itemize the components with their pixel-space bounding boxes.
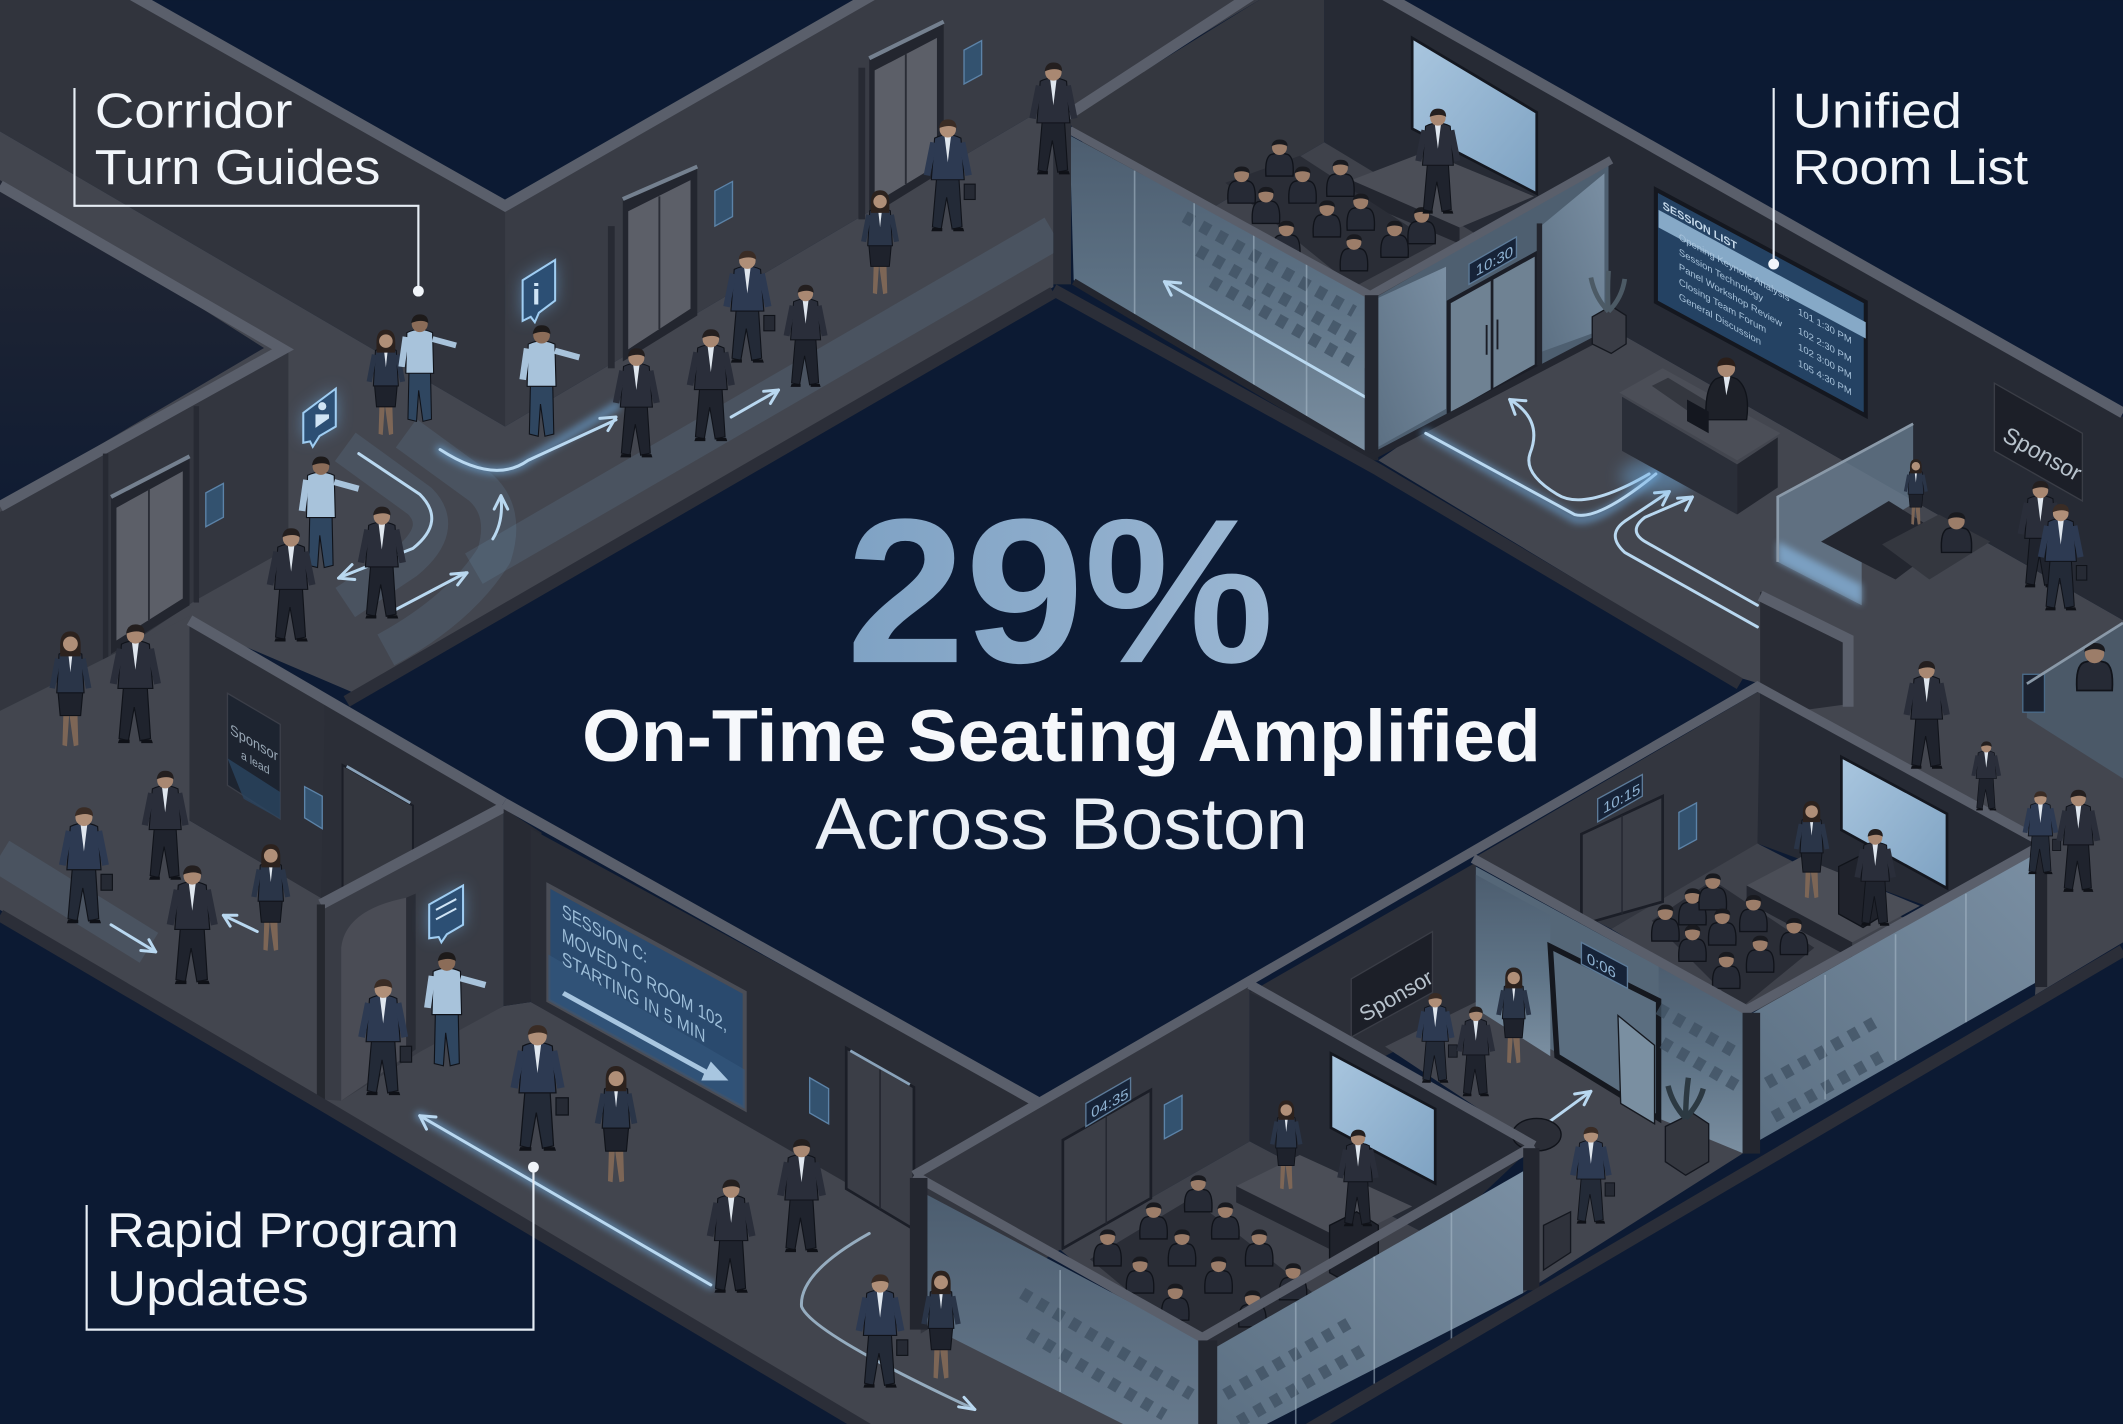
seated person: [1381, 221, 1408, 257]
seated person: [1340, 234, 1368, 271]
booth person: [1905, 459, 1926, 525]
callout: corridor turn guides: [74, 83, 424, 297]
desk glow: [1621, 459, 1697, 494]
person: lobby man: [1418, 993, 1457, 1083]
panel: lower-left corridor level: [0, 616, 1202, 1424]
person: speaker room two: [1857, 829, 1893, 926]
room three wall sign: [1164, 1095, 1182, 1139]
wall stub edge: [1760, 596, 1848, 707]
seated person: [1094, 1229, 1121, 1266]
lobby floor: [1385, 1002, 1757, 1293]
seated person: [1699, 873, 1727, 910]
room three glass right mullions: [1296, 1213, 1451, 1424]
room two left glass chairs: [1659, 1009, 1737, 1086]
callout: rapid program updates: [87, 1162, 539, 1330]
room three screen wall: [1250, 984, 1534, 1239]
guide arrow: main turn: [440, 417, 616, 470]
screen text: SESSION C:: [562, 901, 647, 968]
arch opening: [341, 898, 406, 1101]
icon: person sign: [303, 389, 336, 447]
room three clock: 04:35: [1091, 1086, 1129, 1122]
room one corner pillar: [1365, 295, 1378, 460]
sponsor sign: Sponsor: [1999, 422, 2087, 486]
screen: session update: [548, 886, 745, 1109]
person: man: [787, 285, 825, 387]
person: lobby man: [1459, 1006, 1493, 1096]
person: man: [270, 528, 312, 642]
screen: session update: STARTING IN 5 MIN: [562, 948, 705, 1048]
panel: upper-left corridor level: [0, 0, 1259, 731]
room two glass chairs: [1767, 1018, 1889, 1117]
seated person: [1168, 1229, 1196, 1266]
room three clock: [1086, 1078, 1131, 1127]
person: lobby woman: [1499, 968, 1529, 1063]
sponsor sign: [1994, 383, 2087, 501]
board rows: Opening Keynote Analysis: [1679, 232, 1789, 304]
room three screen: [1331, 1053, 1435, 1183]
wall stub: [1760, 592, 1848, 711]
guide arrow: inner return: [338, 454, 432, 580]
person: man with case: [927, 119, 975, 231]
board rows: Closing Team Forum: [1679, 277, 1766, 336]
second booth: [2023, 623, 2123, 779]
room one glass right: [1378, 267, 1446, 447]
seated person: [1279, 1263, 1307, 1300]
room three glass left: [921, 1192, 1202, 1424]
person: lobby man: [1573, 1127, 1615, 1224]
room two clock: 10:15: [1603, 781, 1640, 817]
booth lounge: [1778, 424, 1990, 605]
wall top edge: [131, 0, 873, 206]
callout text: Updates: [107, 1261, 309, 1316]
seated person: [1239, 1290, 1266, 1327]
person: man: [690, 329, 732, 441]
reception desk: [1619, 368, 1780, 515]
room three audience: [1094, 1175, 1307, 1327]
floor wayfinding: corridor turn: [338, 390, 779, 650]
room three glass right: [1216, 1171, 1523, 1424]
sponsor banner: [227, 693, 280, 819]
seated person: [1205, 1256, 1232, 1293]
seated person: [1679, 925, 1706, 961]
desk monitor: [1687, 399, 1709, 433]
seated person: [1313, 200, 1341, 237]
room one glass left chairs: [1185, 217, 1354, 363]
seated person: [1184, 1175, 1212, 1212]
person: man: [616, 348, 657, 457]
route arrowhead: [1510, 399, 1526, 414]
corridor slab edge left: [0, 915, 873, 1424]
callout leader: [74, 88, 418, 291]
room one clock: [1469, 237, 1516, 284]
route: lower: [1615, 492, 1757, 627]
room one clock: 10:30: [1476, 244, 1513, 280]
arrow: lower-left left: [223, 915, 257, 932]
person: man with case: [362, 979, 412, 1095]
long wall: [531, 829, 1043, 1225]
person: man walking: [1907, 661, 1947, 769]
elevator light bar: [347, 766, 410, 803]
corridor light band: [474, 233, 1053, 569]
top rails: lower block: [914, 686, 2044, 1338]
person: man: [710, 1180, 752, 1293]
right corridor slab edge: [1053, 290, 1740, 684]
right corridor floor: [1378, 334, 2123, 995]
room two glass right: [1751, 849, 2042, 1141]
room one screen: [1412, 38, 1537, 194]
route: upper: [1426, 433, 1656, 515]
room two glass panels and doors: [1476, 875, 1744, 1154]
seated person: [1289, 167, 1316, 203]
callout text: Room List: [1793, 140, 2029, 195]
corner pillars: [910, 846, 2047, 1424]
seated person: [1708, 909, 1736, 945]
seated person: [1140, 1202, 1167, 1239]
lobby round table: [1512, 1118, 1561, 1151]
receptionist: [1706, 357, 1748, 420]
elevator wall: [321, 701, 504, 904]
back wall, up-right section: [505, 0, 1259, 427]
arch inner side: [406, 894, 416, 1056]
room two back wall: [1473, 691, 1760, 929]
room three stage: [1236, 1155, 1412, 1256]
room one door jamb: [1537, 223, 1542, 366]
seated person: [1713, 952, 1740, 988]
person: man with tablet: [514, 1025, 568, 1151]
room one glass far right: [1541, 173, 1604, 352]
room one doors: [1449, 253, 1537, 416]
lower-left floor band: [0, 856, 149, 948]
room one left pillar: [1053, 119, 1071, 284]
board rows: 101 1:30 PM: [1798, 307, 1852, 347]
floor glow band: [440, 406, 616, 470]
room three podium: [1330, 1212, 1378, 1286]
potted plant: [1591, 271, 1626, 353]
left wall top edge: [0, 186, 283, 506]
booth person: [1941, 512, 1972, 552]
lobby sponsor sign: Sponsor: [1355, 965, 1437, 1027]
arrow: rapid update floor: [420, 1116, 711, 1285]
room one right front backing: [1370, 162, 1608, 460]
person: man with case: [859, 1274, 908, 1388]
board rows: Session Technology: [1679, 247, 1764, 305]
panel: lower-right rooms: [910, 686, 2123, 1424]
person: woman: [52, 631, 89, 746]
lobby chair: [1544, 1212, 1571, 1270]
elevator: long wall: [846, 1048, 914, 1229]
room one glass base: [1074, 282, 1598, 458]
person: woman: [864, 190, 897, 294]
room one side wall: [1067, 0, 1324, 244]
wall pillars: [103, 68, 865, 668]
room two clock: [1598, 774, 1642, 822]
room three side wall: [921, 984, 1250, 1334]
room two screen: [1841, 757, 1947, 888]
great wall top edge: [1384, 0, 2123, 413]
wall signs: [206, 41, 982, 942]
callout text: Unified: [1793, 83, 1962, 138]
callout dot: [1768, 259, 1779, 269]
back wall, up-left section: [0, 0, 505, 427]
headline: On-Time Seating Amplified: [582, 696, 1541, 777]
person: man: [62, 807, 112, 923]
sponsor banner: a lead: [241, 747, 270, 778]
room three glass left mullion: [1059, 1270, 1061, 1392]
sponsor banner: Sponsor: [230, 722, 278, 766]
board rows: [1679, 232, 1852, 398]
seated person: [1212, 1202, 1239, 1239]
room one floor: [1070, 135, 1537, 372]
seated person: [1746, 936, 1774, 972]
room two front backing: [1476, 867, 1744, 1154]
arrow: lower-left right: [111, 925, 156, 952]
person: man in blue: [402, 314, 456, 421]
board rows: 102 2:30 PM: [1798, 326, 1852, 366]
person: staff pointing: [523, 325, 579, 436]
callout: unified room list: [1768, 83, 2029, 269]
wall block: [504, 808, 542, 1006]
icon: info sign: i: [532, 279, 540, 312]
floor light band inner turn: [345, 447, 431, 603]
arch wall: [321, 808, 504, 1101]
elevator: rear lower-left: [343, 765, 413, 914]
guide arrow: lower: [389, 573, 467, 613]
seated person: [1679, 888, 1706, 925]
room two seating block: [1652, 880, 1814, 1009]
icon: wall sign 3: [206, 483, 223, 527]
person: man: [2041, 504, 2087, 610]
session list board: [1656, 190, 1866, 416]
subheading: Across Boston: [815, 784, 1308, 865]
person: man with case: [361, 507, 403, 619]
room one top edge: [1062, 0, 1252, 119]
callout leader: [87, 1167, 533, 1330]
elevator: top corridor far: [869, 22, 944, 217]
callout text: Rapid Program: [107, 1203, 459, 1258]
person: man: [1973, 741, 1999, 810]
room three glass right chairs: [1225, 1320, 1367, 1422]
room two stage: [1747, 857, 1920, 959]
wall sign: long wall: [810, 1078, 829, 1124]
outer wall edge: sponsor section: [190, 620, 504, 803]
corridor floor: [0, 103, 1053, 731]
icon: info sign: [523, 260, 555, 322]
board rows: Panel Workshop Review: [1679, 262, 1783, 330]
callout text: Corridor: [95, 83, 292, 138]
room three glass left chairs: [1022, 1293, 1191, 1415]
icon: wall sign 1: [715, 181, 732, 226]
elevator: left wall: [111, 456, 190, 654]
person: woman with tablet: [598, 1066, 634, 1182]
lower corridor floor: [318, 1002, 1202, 1424]
elevator: top corridor near: [623, 167, 697, 362]
seated person: [1652, 904, 1679, 941]
corridor slab edge: [347, 292, 1053, 701]
left wall face: [0, 349, 288, 718]
lower-left floor: [0, 616, 321, 1099]
board rows: General Discussion: [1679, 292, 1761, 348]
board rows: 105 4:30 PM: [1798, 358, 1852, 398]
seated person: [1327, 160, 1354, 196]
icon: wall sign 2: [964, 41, 982, 84]
person: speaker room one: [1418, 109, 1457, 214]
room one glass mullions: [1135, 171, 1307, 417]
room two elevator: [1581, 796, 1663, 925]
glow route: [1426, 433, 1656, 519]
callout leader: [1773, 88, 1775, 264]
person: woman: [254, 844, 288, 951]
route: lower inner: [1636, 497, 1757, 605]
person: man: [2021, 481, 2060, 587]
room two audience: [1652, 873, 1808, 988]
great wall: [1324, 0, 2123, 620]
person: woman: [369, 330, 403, 435]
callout dot: [528, 1162, 539, 1173]
guide arrow: far: [731, 390, 779, 417]
route: curved door: [1510, 399, 1649, 500]
person: speaker room three: [1340, 1130, 1376, 1226]
sponsor wall: [190, 623, 325, 900]
dark roof block: [0, 180, 264, 504]
person: staff turning: [302, 457, 359, 568]
room three floor: [1060, 1141, 1435, 1368]
screen arrow: [562, 991, 728, 1080]
room one top rails: [1070, 130, 1611, 295]
big stat: 29%: [846, 476, 1274, 706]
person: man: [145, 771, 186, 880]
room two door clock: [1581, 942, 1627, 988]
seated person: [1780, 918, 1808, 955]
person: man: [2059, 790, 2097, 892]
corner post: [317, 904, 325, 1101]
seated person: [1245, 1229, 1273, 1266]
lobby planter: [1665, 1078, 1709, 1175]
person: man far: [1033, 63, 1074, 174]
arch wall top edge: [321, 807, 504, 904]
seated person: [1228, 167, 1255, 203]
lower block slab edge: [1308, 950, 2123, 1424]
room one stage: [1351, 152, 1534, 244]
room one seating block: [1225, 156, 1435, 287]
person: woman room two: [1796, 801, 1827, 898]
seated person: [1161, 1284, 1189, 1320]
room one glass left: [1070, 135, 1365, 451]
seated person: [1252, 187, 1280, 223]
room one audience: [1228, 139, 1435, 271]
lobby arrow: [1550, 1091, 1591, 1121]
callout dot: [413, 286, 424, 297]
icon: message sign: [429, 886, 463, 942]
board heading: SESSION LIST: [1663, 199, 1737, 253]
person: staff tablet: [427, 952, 485, 1066]
people: top corridor: [52, 63, 1074, 746]
floor light bands: [386, 433, 499, 650]
panel: room one and right concourse: [1053, 0, 2123, 995]
person: man: [113, 624, 158, 743]
room three seating block: [1090, 1198, 1313, 1361]
seated person: [1740, 895, 1767, 932]
room two glass mullions: [1825, 894, 1966, 1099]
seated person: [1126, 1256, 1154, 1293]
small sign: [305, 787, 322, 829]
people: rooms and right side: [1272, 109, 2097, 1226]
lobby back wall: [1250, 862, 1476, 1056]
room three elevator: [1063, 1090, 1151, 1248]
seated person: [1408, 207, 1435, 244]
person: man: [170, 865, 214, 984]
lobby sponsor sign: [1351, 932, 1437, 1037]
board rows: 102 3:00 PM: [1798, 342, 1852, 382]
screen: session update: MOVED TO ROOM 102,: [562, 925, 727, 1037]
guide arrow: up: [493, 496, 508, 539]
long wall top edge: [504, 803, 1040, 1103]
room two wall sign: [1679, 803, 1697, 849]
person: woman room three: [1272, 1100, 1300, 1189]
person: man with case: [727, 251, 775, 363]
callout text: Turn Guides: [95, 140, 380, 195]
people: lower corridor: [62, 771, 958, 1388]
room two floor: [1611, 844, 1936, 1013]
person: man: [2025, 791, 2061, 874]
room two screen wall: [1757, 691, 2044, 907]
seated person: [1347, 194, 1374, 230]
room two podium: [1839, 853, 1885, 927]
person: woman: [924, 1271, 958, 1379]
arrow: curved floor: [801, 1233, 975, 1409]
seated person: [1266, 139, 1293, 176]
floor routes to desk: [1426, 399, 1757, 627]
person: man: [780, 1139, 823, 1252]
room two door clock: 0:06: [1587, 951, 1616, 982]
seated person: [1272, 221, 1300, 257]
room one floor arrow: [1164, 282, 1365, 397]
